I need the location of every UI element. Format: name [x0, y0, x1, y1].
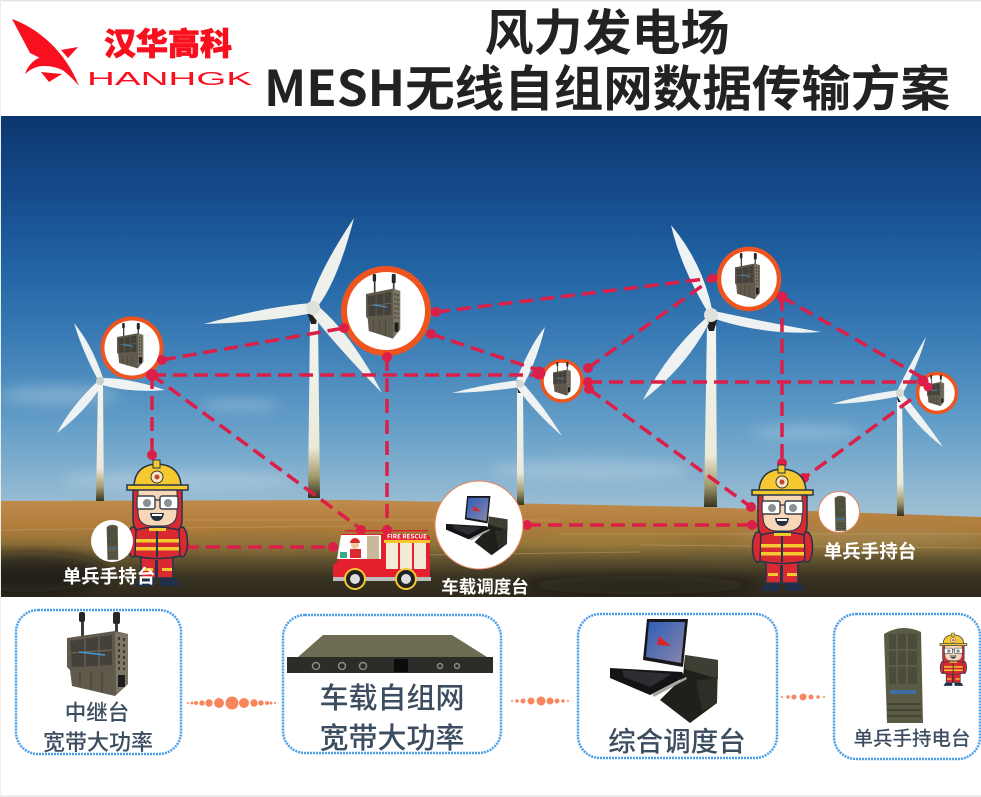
connector dots 1	[187, 696, 276, 710]
fire truck: FIRE RESCUE	[387, 532, 427, 540]
handheld device	[884, 628, 923, 723]
icon: red bird logo	[12, 19, 79, 86]
firefighter right	[752, 465, 813, 591]
label: console: 车载调度台	[441, 574, 529, 599]
logo latin name: HANHGK	[87, 69, 252, 89]
relay node C	[542, 361, 582, 401]
wind turbine 5	[832, 337, 943, 516]
relay node E	[918, 374, 956, 412]
relay node D	[719, 249, 779, 309]
logo	[12, 19, 252, 89]
wind turbine 4	[643, 225, 821, 507]
mesh network links	[152, 278, 928, 547]
handheld circle right	[818, 492, 860, 532]
vehicle mesh sublabel: 宽带大功率	[319, 715, 465, 757]
connector dots 3	[781, 694, 825, 700]
logo name: 汉华高科	[104, 27, 232, 62]
handheld circle left	[91, 520, 133, 562]
vehicle mesh label: 车载自组网	[319, 675, 465, 717]
panel: handheld	[834, 614, 980, 759]
firefighter left	[127, 460, 188, 586]
wind turbine 1	[57, 323, 165, 501]
relay node A	[102, 318, 162, 378]
fire truck	[333, 530, 431, 590]
panel: dispatch console	[578, 614, 777, 759]
console circle	[435, 481, 523, 569]
wind turbine 3	[452, 327, 562, 505]
panel: relay	[16, 610, 181, 757]
connector dots 2	[511, 696, 569, 706]
relay node B	[344, 269, 428, 353]
label: handheld right: 单兵手持台	[824, 538, 916, 564]
link end dots	[146, 274, 932, 552]
relay device	[67, 612, 128, 696]
relay label: 中继台	[65, 696, 129, 727]
console device	[610, 619, 718, 723]
title: MESH无线自组网数据传输方案	[264, 50, 950, 121]
console label: 综合调度台	[608, 719, 746, 759]
wind turbine 2	[204, 218, 382, 498]
wind farm photo	[0, 116, 981, 597]
handheld label: 单兵手持电台	[853, 722, 971, 751]
title	[264, 0, 950, 121]
panel: vehicle mesh	[283, 615, 501, 757]
rack device	[287, 635, 493, 673]
label: handheld left: 单兵手持台	[63, 563, 155, 589]
small firefighter	[940, 633, 967, 686]
relay sublabel: 宽带大功率	[43, 725, 153, 757]
